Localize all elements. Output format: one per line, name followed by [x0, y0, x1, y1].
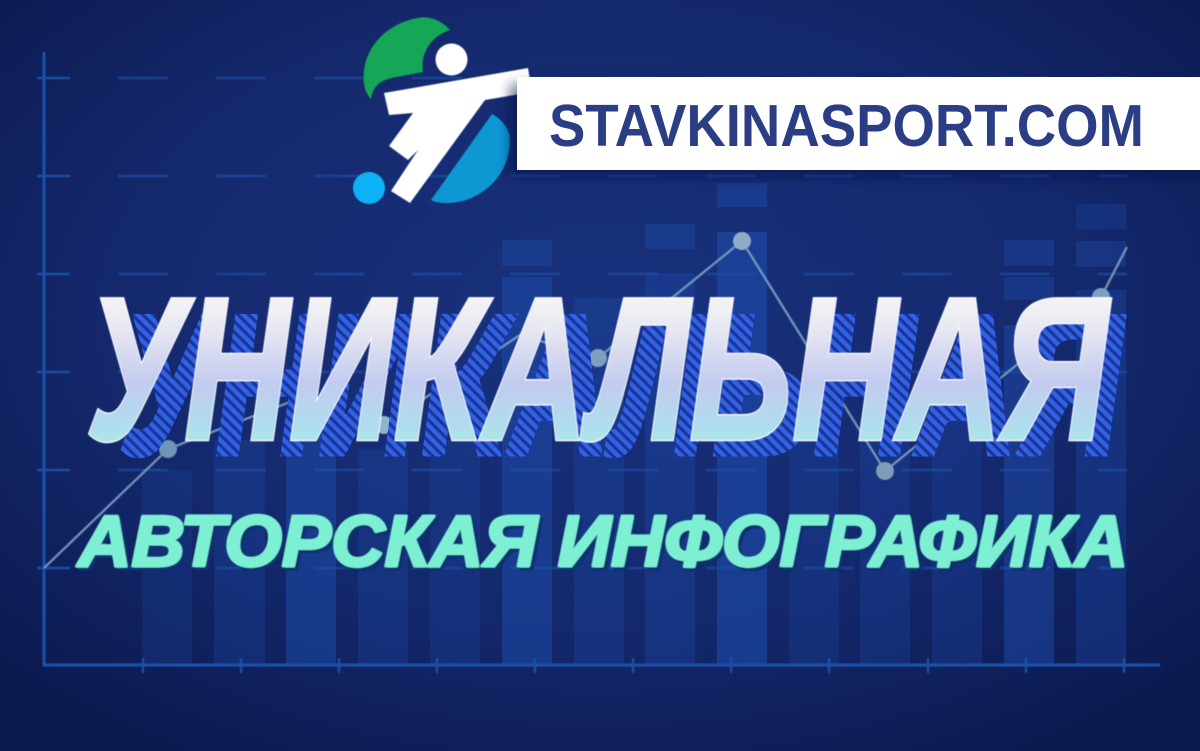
subtitle: АВТОРСКАЯ ИНФОГРАФИКА	[76, 502, 1128, 582]
logo icon	[353, 17, 532, 204]
line chart	[44, 232, 1127, 568]
chart axes	[37, 52, 1160, 673]
logo banner	[517, 77, 1200, 170]
chart gridlines	[118, 78, 1127, 568]
logo banner shadow	[510, 84, 1200, 176]
logo banner: STAVKINASPORT.COM	[549, 93, 1144, 159]
subtitle: АВТОРСКАЯ ИНФОГРАФИКА	[79, 505, 1131, 585]
bar chart	[142, 183, 1126, 665]
